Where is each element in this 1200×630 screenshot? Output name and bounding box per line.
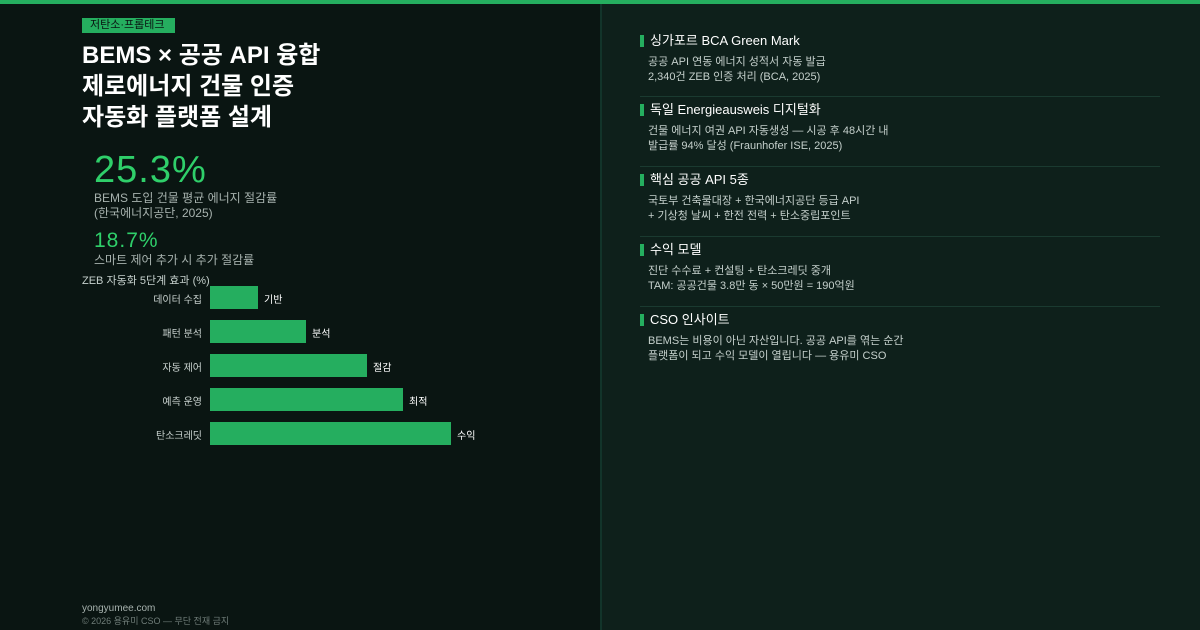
bar chart: 데이터 수집 bbox=[153, 295, 202, 306]
panel: APIs: + 기상청 날씨 + 한전 전력 + 탄소중립포인트 bbox=[648, 210, 851, 222]
panel: insight: CSO 인사이트 bbox=[650, 312, 730, 327]
bar chart: 패턴 분석 bbox=[162, 329, 202, 340]
bar chart: 자동 제어 bbox=[162, 363, 202, 374]
stat: 25.3% bbox=[94, 149, 277, 220]
stat: 25.3%: BEMS 도입 건물 평균 에너지 절감률 bbox=[94, 191, 277, 205]
stat: 25.3%: (한국에너지공단, 2025) bbox=[94, 206, 213, 220]
panel: Singapore: 2,340건 ZEB 인증 처리 (BCA, 2025) bbox=[648, 71, 820, 83]
panel: Singapore bbox=[640, 33, 826, 83]
panel: revenue: TAM: 공공건물 3.8만 동 × 50만원 = 190억원 bbox=[648, 280, 855, 292]
stat: 18.7%: 18.7% bbox=[94, 229, 159, 252]
panel: Germany: 독일 Energieausweis 디지털화 bbox=[650, 102, 821, 117]
tag bbox=[82, 18, 175, 33]
title: 자동화 플랫폼 설계 bbox=[82, 104, 272, 131]
title bbox=[82, 42, 320, 131]
bar chart bbox=[153, 286, 475, 445]
stat: 18.7%: 스마트 제어 추가 시 추가 절감률 bbox=[94, 253, 254, 267]
panel: Germany bbox=[640, 102, 889, 152]
footer: yongyumee.com bbox=[82, 603, 155, 614]
panel: revenue bbox=[640, 242, 855, 292]
footer: © 2026 용유미 CSO — 무단 전재 금지 bbox=[82, 616, 229, 626]
panel: APIs: 국토부 건축물대장 + 한국에너지공단 등급 API bbox=[648, 195, 859, 207]
bar chart: 수익 bbox=[457, 431, 475, 442]
title: BEMS × 공공 API 융합 bbox=[82, 42, 320, 69]
title: 제로에너지 건물 인증 bbox=[82, 73, 294, 100]
stat: 18.7% bbox=[94, 229, 254, 267]
bar chart: 절감 bbox=[373, 363, 391, 374]
panel: APIs bbox=[640, 172, 859, 222]
bar chart: 최적 bbox=[409, 397, 427, 408]
panel: Germany: 발급률 94% 달성 (Fraunhofer ISE, 2025) bbox=[648, 140, 842, 152]
tag: 저탄소·프롭테크 bbox=[90, 19, 165, 31]
panel: insight bbox=[640, 312, 904, 362]
panel: insight: 플랫폼이 되고 수익 모델이 열립니다 — 용유미 CSO bbox=[648, 350, 886, 362]
chart title: ZEB 자동화 5단계 효과 (%) bbox=[82, 275, 210, 287]
panel: Singapore: 싱가포르 BCA Green Mark bbox=[650, 33, 800, 48]
stat: 25.3%: 25.3% bbox=[94, 149, 207, 191]
panel: Singapore: 공공 API 연동 에너지 성적서 자동 발급 bbox=[648, 56, 826, 68]
panel: insight: BEMS는 비용이 아닌 자산입니다. 공공 API를 엮는 순간 bbox=[648, 335, 904, 347]
footer bbox=[82, 603, 229, 626]
bar chart: 기반 bbox=[264, 295, 282, 306]
panel: Germany: 건물 에너지 여권 API 자동생성 — 시공 후 48시간 내 bbox=[648, 125, 889, 137]
bar chart: 예측 운영 bbox=[162, 397, 202, 408]
panel: APIs: 핵심 공공 API 5종 bbox=[650, 172, 749, 187]
panel: revenue: 진단 수수료 + 컨설팅 + 탄소크레딧 중개 bbox=[648, 265, 831, 277]
panel: revenue: 수익 모델 bbox=[650, 242, 701, 257]
bar chart: 탄소크레딧 bbox=[156, 431, 202, 442]
bar chart: 분석 bbox=[312, 329, 330, 340]
